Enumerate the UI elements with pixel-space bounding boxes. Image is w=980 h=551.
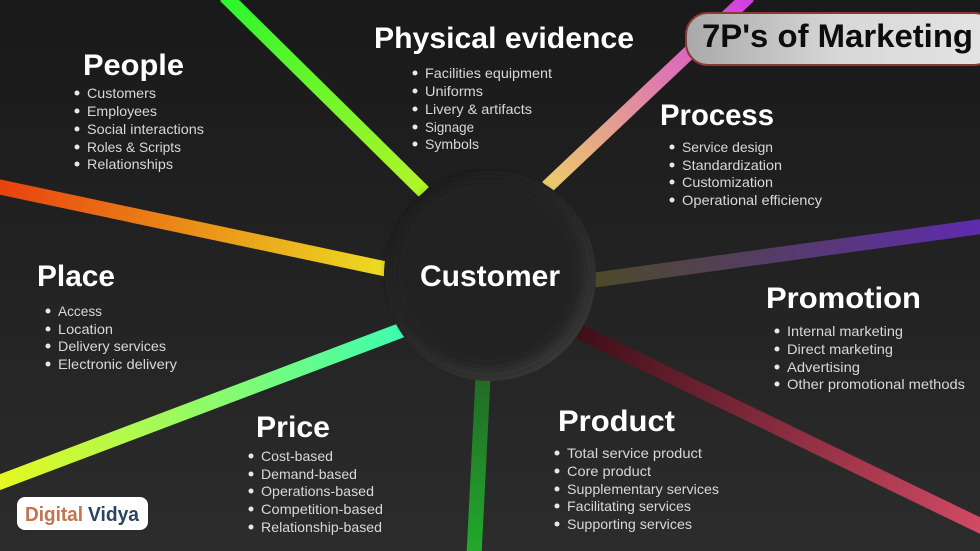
title pill: 7P's of Marketing [686,13,980,65]
panel: Process: Customization [682,174,773,190]
panel: Product [554,405,719,532]
panel: Physical evidence: Physical evidence [374,22,634,55]
panel: Place: Access [58,303,102,319]
panel: Process: Operational efficiency [682,192,822,208]
ray: green to Physical evidence [225,0,424,192]
panel: Process: Process [660,99,774,132]
panel: Physical evidence [374,22,634,152]
panel: People: People [83,49,184,82]
ray: purple to Promotion [595,226,980,280]
panel: People: Employees [87,103,157,119]
panel: People: Social interactions [87,121,204,137]
panel: Place: Place [37,260,115,293]
panel: Promotion [766,282,965,392]
ray: yellow-orange to Place [0,186,386,269]
panel: Place [37,260,177,372]
panel: Promotion: Other promotional methods [787,376,965,392]
title pill: 7P's of Marketing: 7P's of Marketing [702,18,973,54]
panel: People: Relationships [87,156,173,172]
panel: Price: Relationship-based [261,519,382,535]
panel: Promotion: Promotion [766,282,921,315]
logo: Digital Vidya [17,497,148,530]
panel: Product: Supplementary services [567,481,719,497]
panel: Promotion: Direct marketing [787,341,893,357]
panel: Place: Location [58,321,113,337]
panel: People [74,49,204,172]
centre circle: Customer: Customer [420,260,560,293]
panel: Physical evidence: Symbols [425,136,479,152]
panel: Place: Electronic delivery [58,356,177,372]
panel: Promotion: Advertising [787,359,860,375]
logo: Digital Vidya: Vidya [88,504,140,526]
panel: Price: Price [256,411,330,444]
panel: Price: Demand-based [261,466,357,482]
panel: Product: Core product [567,463,651,479]
panel: Price: Operations-based [261,483,374,499]
ray: magenta to Process [547,0,749,187]
ray: red to Product [580,332,980,528]
ray: green to bottom [474,378,483,551]
panel: Price [248,411,383,535]
panel: Promotion: Internal marketing [787,323,903,339]
panel: People: Roles & Scripts [87,139,181,155]
centre circle: Customer [384,169,596,381]
panel: Place: Delivery services [58,338,166,354]
panel: Price: Cost-based [261,448,333,464]
panel: Price: Competition-based [261,501,383,517]
panel: Process [660,99,822,208]
panel: Product: Facilitating services [567,498,691,514]
panel: Physical evidence: Uniforms [425,83,483,99]
panel: People: Customers [87,85,156,101]
logo: Digital Vidya: Digital [25,504,83,526]
panel: Product: Total service product [567,445,702,461]
panel: Physical evidence: Livery & artifacts [425,101,532,117]
panel: Physical evidence: Signage [425,119,474,135]
panel: Product: Supporting services [567,516,692,532]
panel: Process: Service design [682,139,773,155]
panel: Physical evidence: Facilities equipment [425,65,552,81]
panel: Product: Product [558,405,675,438]
panel: Process: Standardization [682,157,782,173]
ray: aqua-yellow to Price [0,330,402,484]
